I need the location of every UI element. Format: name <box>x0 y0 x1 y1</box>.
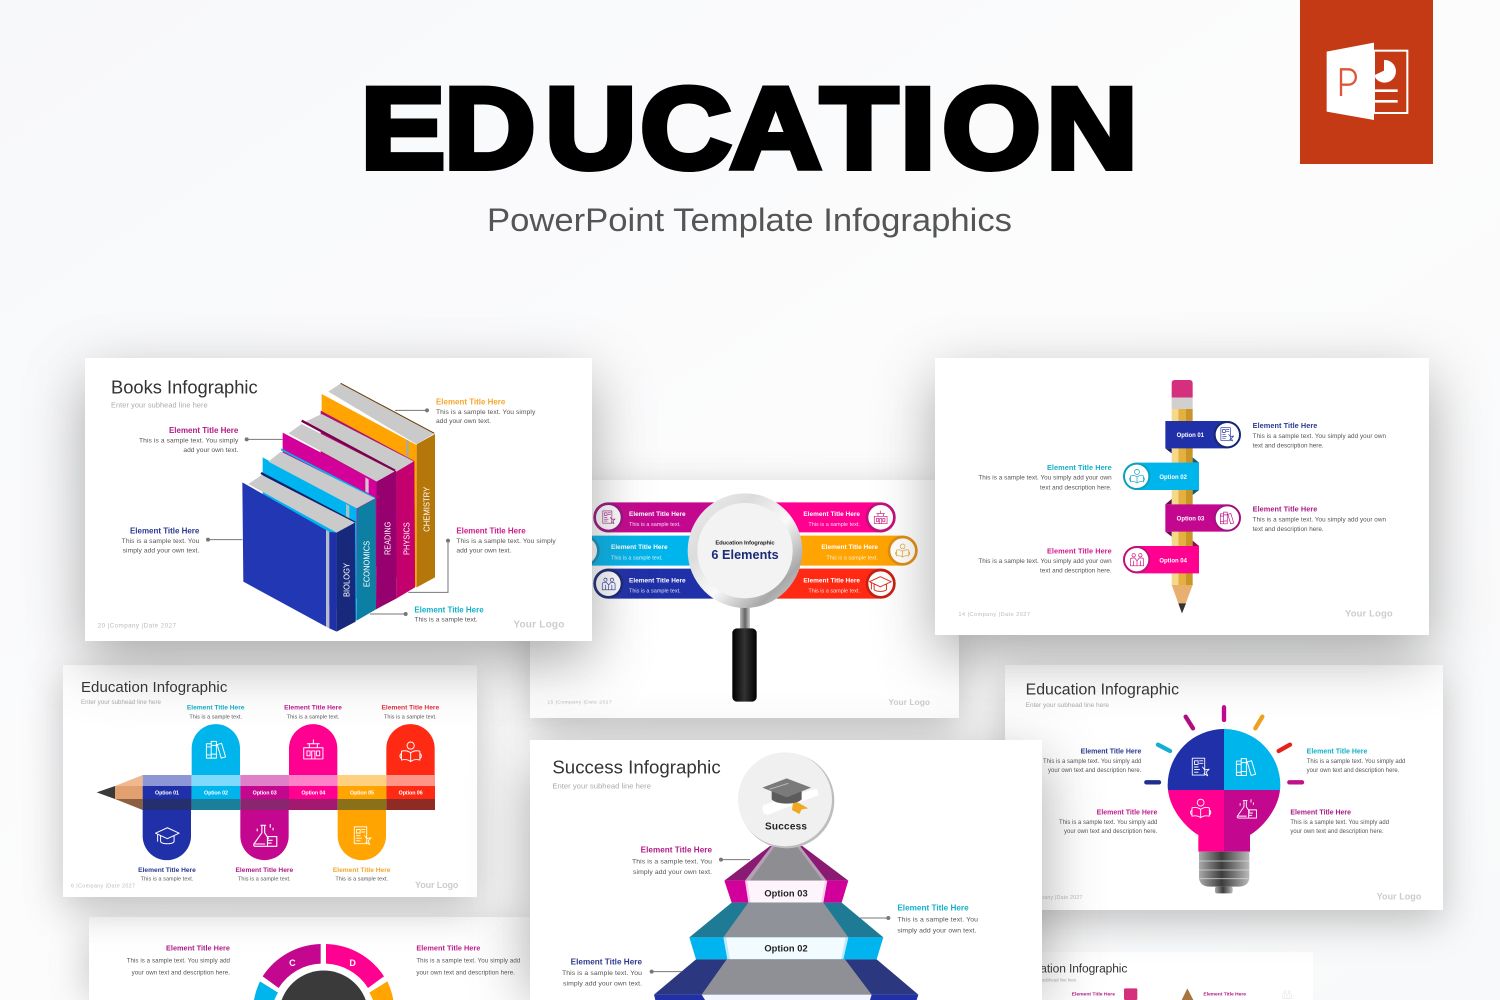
ribbon: option 02 <box>1123 457 1199 495</box>
callout: right: This is a sample text. You <box>897 917 978 924</box>
success badge: Success <box>765 821 807 832</box>
main title: EDUCATION <box>361 64 1138 193</box>
option labels: Option 02 <box>204 790 228 796</box>
heading: Education Infographic <box>81 679 228 696</box>
bottom labels: This is a sample text. <box>238 877 291 883</box>
book: physics: PHYSICS <box>402 522 412 555</box>
ribbon: option 04: Option 04 <box>1159 558 1188 564</box>
text block: bottom left: your own text and description here. <box>1064 829 1158 835</box>
option labels: Option 01 <box>155 790 179 796</box>
logo text: Your Logo <box>888 697 930 707</box>
right pill labels: This is a sample text. <box>826 555 878 561</box>
text: element title: Element Title Here <box>1203 991 1246 997</box>
top labels: Element Title Here <box>284 705 342 712</box>
icons <box>602 511 910 591</box>
success badge <box>738 752 834 848</box>
callout: physics: add your own text. <box>456 547 511 554</box>
text block: option 01 <box>1253 421 1386 450</box>
bulb rays <box>1146 707 1302 782</box>
pencil body bands <box>143 775 435 810</box>
right pill labels: This is a sample text. <box>808 522 860 528</box>
book: chemistry: CHEMISTRY <box>421 487 431 532</box>
text block: option 01: This is a sample text. You simply add your own <box>1253 433 1386 440</box>
text block: option 01: text and description here. <box>1253 443 1324 450</box>
step 01 <box>654 959 918 1000</box>
footer: 20 |Company |Date 2027 <box>98 622 176 629</box>
book: economics <box>263 448 376 621</box>
text block: left: This is a sample text. You simply add <box>127 958 231 965</box>
right pill labels: This is a sample text. <box>808 589 860 595</box>
callout: biology: simply add your own text. <box>123 547 199 554</box>
text block: bottom left: Element Title Here <box>1097 810 1157 817</box>
callout: chemistry: Element Title Here <box>436 397 506 406</box>
callout: reading: Element Title Here <box>169 426 239 435</box>
subtitle: PowerPoint Template Infographics <box>487 202 1012 238</box>
callout: physics: This is a sample text. You simply <box>456 538 556 545</box>
option labels <box>155 790 423 796</box>
left pill labels: This is a sample text. <box>629 589 681 595</box>
callout: top left: Element Title Here <box>641 845 712 854</box>
text block: option 04: text and description here. <box>1040 568 1112 575</box>
callout: physics: Element Title Here <box>456 526 526 535</box>
text block: top right: Element Title Here <box>1307 749 1367 756</box>
panel: books slide <box>85 358 592 641</box>
callout: economics: This is a sample text. <box>414 617 478 624</box>
top labels: This is a sample text. <box>287 714 340 720</box>
text block: bottom right: your own text and description here. <box>1290 829 1384 835</box>
text block: option 04: This is a sample text. You simply add your own <box>978 558 1112 565</box>
text block: bottom left: This is a sample text. You simply add <box>1059 820 1157 826</box>
footer: 15 |Company |Date 2027 <box>547 699 612 705</box>
subhead: Enter your subhead line here <box>111 400 208 409</box>
step 03: Option 03 <box>764 888 808 898</box>
pencil <box>1172 380 1193 613</box>
left pill labels: Element Title Here <box>629 577 686 584</box>
icon circles <box>568 504 916 597</box>
subhead: subhead line here <box>1042 978 1077 983</box>
bulb quadrants <box>1168 729 1280 852</box>
text block: option 02: text and description here. <box>1040 484 1112 491</box>
subhead: Enter your subhead line here <box>1026 702 1109 709</box>
down bubbles <box>143 810 386 860</box>
text block: bottom left <box>1059 810 1158 835</box>
top labels: This is a sample text. <box>384 714 437 720</box>
callout: chemistry <box>395 397 536 425</box>
text block: option 04 <box>978 546 1112 575</box>
bottom labels: This is a sample text. <box>141 877 194 883</box>
text block: top right: your own text and description here. <box>1307 768 1400 774</box>
text block: option 02 <box>978 463 1112 491</box>
heading: Education Infographic <box>1026 682 1179 699</box>
callout: reading: This is a sample text. You simply <box>139 438 239 445</box>
callout: top left <box>632 845 750 876</box>
left pill labels: Element Title Here <box>611 544 668 551</box>
callout: biology: This is a sample text. You <box>122 538 200 545</box>
callout: chemistry: add your own text. <box>436 418 491 425</box>
left pill labels: Element Title Here <box>629 511 686 518</box>
text block: option 04: Element Title Here <box>1047 546 1112 555</box>
text block: option 02: This is a sample text. You simply add your own <box>978 475 1112 482</box>
ribbon: option 02: Option 02 <box>1159 475 1188 481</box>
logo text: Your Logo <box>415 880 459 890</box>
ribbon: option 04 <box>1123 541 1199 573</box>
right pill labels: Element Title Here <box>803 577 860 584</box>
text block: top left: Element Title Here <box>1081 749 1141 756</box>
footer: 6 |Company |Date 2027 <box>71 883 135 889</box>
text block: right: your own text and description here. <box>416 969 515 976</box>
panel: light bulb slide <box>1005 665 1443 910</box>
magnifying glass: 6 Elements <box>711 548 779 562</box>
option labels: Option 05 <box>350 790 374 796</box>
pencil tip <box>1182 988 1193 1000</box>
text block: option 01: Element Title Here <box>1253 421 1317 430</box>
callout: physics <box>408 526 556 592</box>
book: economics: ECONOMICS <box>362 541 372 587</box>
text: element title: Element Title Here <box>1072 991 1115 997</box>
pencil eraser <box>1124 988 1137 1000</box>
text block: option 02: Element Title Here <box>1047 463 1112 472</box>
book: reading: READING <box>382 521 392 555</box>
right pill labels <box>803 511 878 595</box>
callout: right: simply add your own text. <box>897 927 976 934</box>
text block: top left <box>1043 749 1142 774</box>
faint icon <box>1283 991 1291 999</box>
callout: reading <box>139 426 283 454</box>
logo text: Your Logo <box>513 620 564 631</box>
subhead: Enter your subhead line here <box>552 781 651 790</box>
callout: bottom left <box>562 957 682 988</box>
footer: 14 |Company |Date 2027 <box>958 612 1030 618</box>
callout: bottom left: Element Title Here <box>571 957 642 966</box>
ribbon: option 01: Option 01 <box>1177 433 1205 439</box>
callout: economics: Element Title Here <box>414 605 484 614</box>
text block: bottom right <box>1290 810 1389 835</box>
callout: economics <box>370 605 484 624</box>
text block: top left: your own text and description here. <box>1048 768 1142 774</box>
icon: powerpoint logo <box>1300 0 1433 164</box>
right pill labels: Element Title Here <box>821 544 878 551</box>
heading: Education Infographic <box>1013 962 1127 976</box>
option labels: Option 06 <box>399 790 423 796</box>
text block: top right <box>1307 749 1405 774</box>
heading: Books Infographic <box>111 376 258 397</box>
book: biology <box>242 473 356 632</box>
text block: left: your own text and description here. <box>132 969 230 976</box>
left pill labels: This is a sample text. <box>611 555 663 561</box>
icons <box>1191 758 1256 818</box>
book: reading <box>283 424 397 609</box>
panel: vertical pencil slide <box>935 358 1429 635</box>
callout: top left: This is a sample text. You <box>632 858 712 865</box>
magnifying glass <box>688 493 802 702</box>
text block: option 03: text and description here. <box>1253 526 1324 533</box>
text block: right: This is a sample text. You simply add <box>416 958 521 965</box>
ribbon: option 03 <box>1165 499 1241 537</box>
step 02: Option 02 <box>764 944 808 954</box>
left pill labels <box>611 511 686 595</box>
pencil tip <box>97 775 143 810</box>
ribbon: option 01 <box>1165 421 1241 453</box>
option labels: Option 04 <box>301 790 325 796</box>
text block: option 03: This is a sample text. You simply add your own <box>1253 516 1386 523</box>
bulb base <box>1199 852 1249 893</box>
option pills <box>583 502 918 599</box>
logo text: Your Logo <box>1345 609 1393 620</box>
book: biology: BIOLOGY <box>342 563 352 597</box>
text block: option 03 <box>1253 504 1386 533</box>
footer: 19 |Company |Date 2027 <box>1020 895 1082 901</box>
bottom labels: This is a sample text. <box>335 877 388 883</box>
callout: top left: simply add your own text. <box>633 869 712 876</box>
panel: magnifier slide <box>530 480 959 718</box>
callout: chemistry: This is a sample text. You simply <box>436 409 536 416</box>
step 03 <box>724 846 848 903</box>
step 02 <box>689 903 883 959</box>
magnifying glass: Education Infographic <box>715 540 775 546</box>
callout: bottom left: simply add your own text. <box>563 981 642 988</box>
heading: Success Infographic <box>552 756 721 777</box>
text block: top right: This is a sample text. You simply add <box>1307 759 1405 765</box>
text block: bottom right: Element Title Here <box>1290 810 1351 817</box>
callout: biology <box>122 526 242 554</box>
top labels: This is a sample text. <box>189 714 242 720</box>
donut chart: C <box>289 958 296 968</box>
callout: biology: Element Title Here <box>130 526 200 535</box>
ribbon: option 03: Option 03 <box>1177 516 1205 522</box>
panel: circle slide (partly visible) <box>89 917 530 1000</box>
up bubbles <box>192 724 435 775</box>
bottom labels: Element Title Here <box>235 867 293 874</box>
text block: bottom right: This is a sample text. You simply add <box>1290 820 1389 826</box>
panel: education pencil timeline slide <box>63 665 477 897</box>
text block: option 03: Element Title Here <box>1253 504 1317 513</box>
book: chemistry <box>322 383 435 587</box>
option labels: Option 03 <box>253 790 277 796</box>
text block: top left: This is a sample text. You simply add <box>1043 759 1141 765</box>
text block: right: Element Title Here <box>416 944 480 953</box>
text block: left: Element Title Here <box>166 944 230 953</box>
top labels: Element Title Here <box>187 705 245 712</box>
subhead: Enter your subhead line here <box>81 699 162 706</box>
icons <box>156 740 421 846</box>
right pill labels: Element Title Here <box>803 511 860 518</box>
callout: right: Element Title Here <box>897 904 969 913</box>
bottom labels: Element Title Here <box>333 867 391 874</box>
top labels <box>187 705 439 720</box>
callout: right <box>860 904 978 934</box>
bottom labels <box>138 867 391 883</box>
bottom labels: Element Title Here <box>138 867 196 874</box>
left pill labels: This is a sample text. <box>629 522 681 528</box>
callout: reading: add your own text. <box>183 447 238 454</box>
logo text: Your Logo <box>1377 892 1422 902</box>
callout: bottom left: This is a sample text. You <box>562 970 642 977</box>
donut chart <box>254 944 393 1000</box>
panel: bottom right slide (partly visible) <box>1013 952 1313 1000</box>
top labels: Element Title Here <box>381 705 439 712</box>
text block: right <box>416 944 521 976</box>
panel: success slide <box>530 740 1042 1000</box>
text block: left <box>127 944 231 976</box>
book: physics <box>302 411 415 598</box>
donut chart: D <box>349 958 356 968</box>
